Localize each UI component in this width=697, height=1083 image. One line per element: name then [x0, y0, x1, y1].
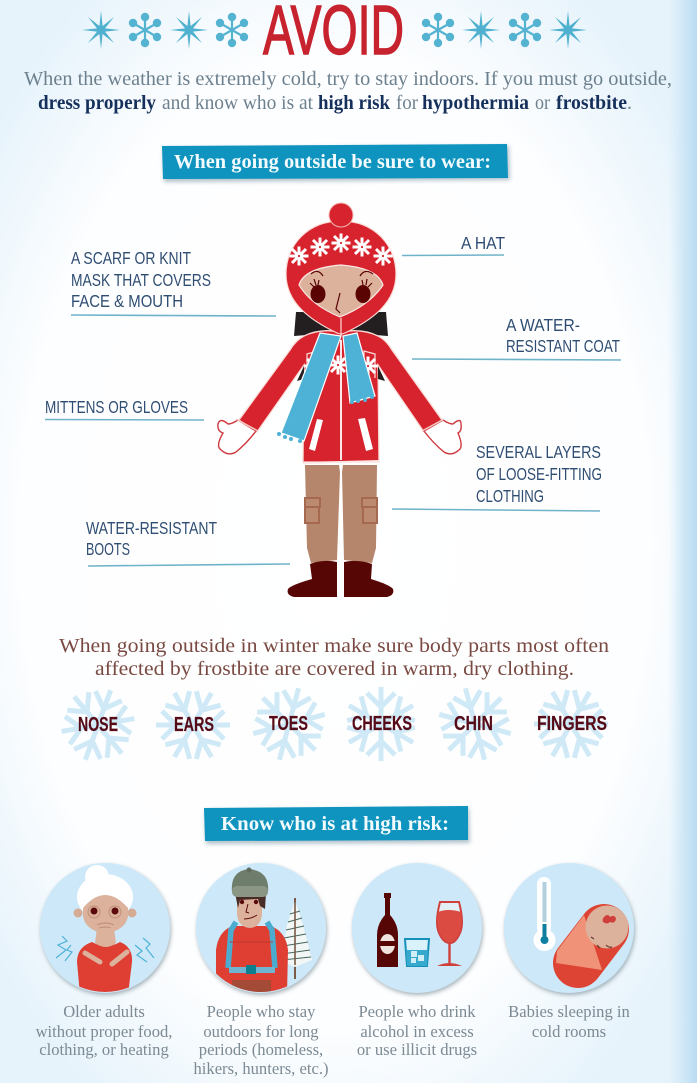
- label: boots: [86, 518, 290, 566]
- banner: what to wear: [162, 144, 510, 182]
- swaddled baby: [556, 906, 628, 970]
- frostbite text: affected by frostbite are covered in warm, dry clothing.: [95, 658, 574, 680]
- label: layers: CLOTHING: [476, 486, 544, 506]
- caption: outdoor people: People who stay: [207, 1002, 315, 1021]
- trousers: [305, 465, 340, 563]
- label: boots: BOOTS: [86, 539, 130, 559]
- torso: [77, 942, 132, 995]
- label: scarf: [71, 248, 276, 316]
- body: [216, 926, 288, 995]
- intro text: and know who is at: [162, 92, 313, 114]
- body part: fingers: [519, 672, 623, 776]
- caption: babies: Babies sleeping in: [508, 1002, 630, 1021]
- boots: [288, 561, 337, 597]
- character illustration: [218, 203, 461, 597]
- intro text: high risk: [318, 92, 391, 114]
- body part: ears: [141, 673, 245, 777]
- pompom: [329, 203, 353, 227]
- body part: cheeks: CHEEKS: [352, 713, 412, 735]
- label: scarf: FACE & MOUTH: [71, 291, 183, 311]
- label: coat: RESISTANT COAT: [506, 336, 620, 356]
- intro text: hypothermia: [422, 92, 529, 114]
- intro text: [24, 68, 672, 114]
- hair: [294, 312, 388, 336]
- caption: babies: cold rooms: [532, 1022, 606, 1041]
- header snowflakes left: [82, 11, 248, 49]
- body part: ears: EARS: [174, 714, 214, 736]
- face: [74, 908, 82, 918]
- intro text: for: [396, 92, 418, 114]
- hair tips: [297, 366, 385, 381]
- body part: nose: [49, 677, 147, 773]
- label: hat: [402, 233, 505, 256]
- body part: toes: [242, 678, 336, 770]
- panel: alcohol and drugs: [352, 863, 483, 995]
- caption: outdoor people: periods (homeless,: [199, 1040, 323, 1059]
- label: layers: [392, 442, 602, 511]
- caption: outdoor people: hikers, hunters, etc.): [193, 1059, 329, 1078]
- label: layers: OF LOOSE-FITTING: [476, 464, 602, 484]
- banner: high risk: [204, 806, 470, 844]
- body part: nose: NOSE: [78, 714, 118, 736]
- panel: older adults: [40, 863, 171, 995]
- body part: fingers: FINGERS: [537, 713, 607, 735]
- red jacket body: [239, 331, 442, 462]
- intro text: frostbite: [556, 92, 627, 114]
- caption: outdoor people: outdoors for long: [203, 1022, 319, 1041]
- intro text: or: [535, 92, 550, 114]
- label: mittens: MITTENS OR GLOVES: [45, 397, 188, 417]
- caption: alcohol and drugs: or use illicit drugs: [357, 1040, 477, 1059]
- scarf: [281, 333, 341, 441]
- neck and arms: [95, 931, 116, 947]
- header snowflakes right: [422, 11, 587, 49]
- intro text: When the weather is extremely cold, try to stay indoors. If you must go outside,: [24, 68, 672, 90]
- label: coat: A WATER-: [506, 315, 580, 335]
- caption: older adults: without proper food,: [36, 1022, 172, 1041]
- jacket patterns: [307, 351, 375, 378]
- body part: toes: TOES: [269, 713, 308, 735]
- caption: older adults: clothing, or heating: [39, 1040, 169, 1059]
- face: [299, 265, 383, 317]
- panel: outdoor people: [196, 863, 327, 995]
- mittens: [218, 420, 256, 454]
- backpack straps: [228, 922, 275, 968]
- label: boots: WATER-RESISTANT: [86, 518, 217, 538]
- hat: [232, 869, 268, 892]
- intro text: .: [627, 92, 632, 114]
- pockets: [309, 419, 323, 451]
- label: hat: A HAT: [461, 233, 505, 253]
- panel: babies: [504, 863, 635, 995]
- caption: alcohol and drugs: People who drink: [358, 1002, 476, 1021]
- caption: older adults: Older adults: [63, 1002, 145, 1021]
- label: coat: [412, 315, 621, 360]
- bottle: [377, 893, 398, 967]
- hood: [286, 221, 396, 334]
- thermometer: [534, 877, 556, 951]
- intro text: dress properly: [38, 92, 156, 114]
- hair: [85, 865, 108, 880]
- body part: chin: [428, 678, 522, 770]
- body part: chin: CHIN: [454, 713, 493, 735]
- caption: alcohol and drugs: alcohol in excess: [360, 1022, 474, 1041]
- frostbite text: [59, 635, 609, 680]
- banner: high risk: Know who is at high risk:: [221, 813, 449, 835]
- label: scarf: A SCARF OR KNIT: [71, 248, 191, 268]
- head: [237, 896, 262, 928]
- hat pattern: [290, 246, 308, 266]
- shiver marks: [56, 936, 154, 962]
- tree: [281, 898, 312, 979]
- glass: [405, 939, 429, 966]
- wine glass: [437, 902, 462, 966]
- label: layers: SEVERAL LAYERS: [476, 442, 601, 462]
- banner: what to wear: When going outside be sure to wear:: [174, 151, 491, 173]
- trouser pockets: [305, 498, 377, 523]
- body part: cheeks: [342, 687, 420, 761]
- label: scarf: MASK THAT COVERS: [71, 270, 211, 290]
- jacket hem: [303, 461, 379, 463]
- frostbite text: When going outside in winter make sure body parts most often: [59, 635, 609, 657]
